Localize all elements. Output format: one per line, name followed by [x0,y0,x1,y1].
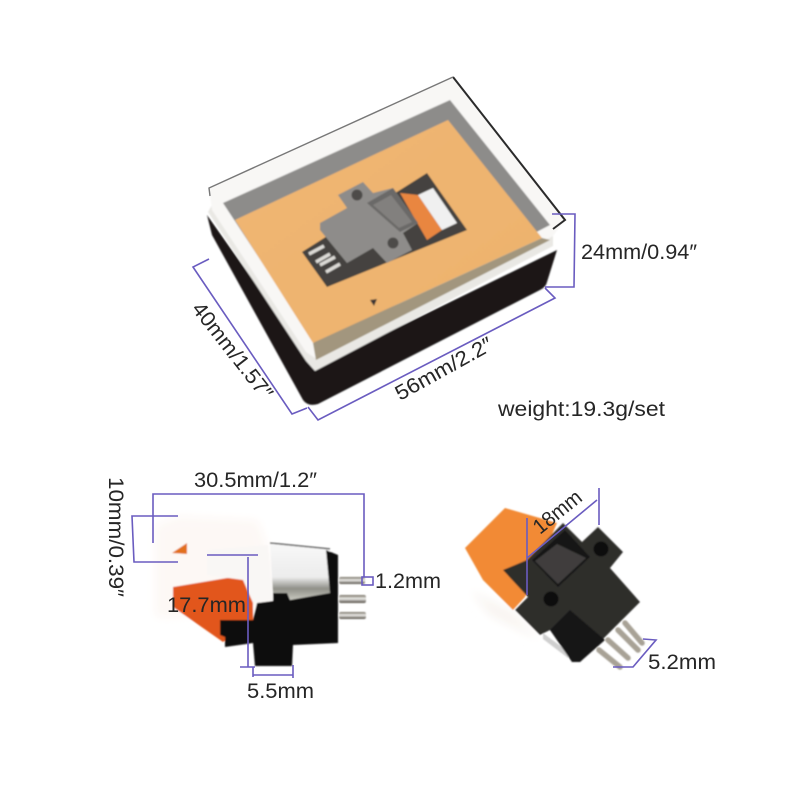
orange stylus [173,577,253,642]
pin box [362,577,373,585]
window floor [373,195,412,228]
side view cartridge photo [155,516,366,666]
shell top edge [270,543,330,549]
cartridge slot [302,173,467,287]
foam strip at front [313,238,550,360]
lid edges [209,77,565,229]
18mm dimension lines [527,488,599,595]
lid dark far edge [453,77,565,229]
cartridge gray body [320,182,418,263]
overall length dimension [153,494,364,577]
label: overall length: 30.5mm/1.2″ [194,469,318,492]
pins [339,577,365,584]
clear lid skirt [208,205,553,371]
cartridge window [367,188,418,232]
pins [309,246,340,272]
label: 18mm: 18mm [529,486,587,539]
width dimension line [193,259,307,414]
5.2mm dimension line [613,639,656,667]
white guard front [207,545,273,603]
label: height: 24mm/0.94″ [581,241,698,264]
black body [220,550,338,666]
label: length: 56mm/2.2″ [391,333,497,405]
silver shell [270,543,332,600]
window floor [535,544,586,584]
label: 17.7mm: 17.7mm [167,594,246,617]
lower block [550,610,605,662]
orange stylus [400,193,442,240]
pins [599,623,642,667]
label: 1.2mm: 1.2mm [375,570,441,593]
black body [503,523,640,662]
stylus dimension [207,554,258,556]
label: weight: weight:19.3g/set [497,398,665,421]
mounting holes [352,190,362,200]
rear view cartridge photo [465,508,642,667]
clear lid top [209,77,565,358]
small orange notch [172,543,187,554]
pale stylus guard wash [155,516,272,617]
lid near edge [209,77,453,196]
label: width: 40mm/1.57″ [187,298,278,405]
white stylus guard [418,188,457,230]
length dimension line [308,288,555,420]
product photo: boxed cartridge [207,77,565,405]
window [532,530,590,587]
black box base [207,215,557,405]
pale guard wash [470,590,540,640]
mounting holes [594,542,608,556]
label: 5.5mm: 5.5mm [247,680,314,703]
height dimension [132,516,178,562]
small notch mark [370,299,377,306]
height dimension line [545,214,575,287]
orange foam pad [235,120,542,343]
stylus vertical dimension [240,557,255,667]
silver shell edge [543,633,570,658]
label: height: 10mm/0.39″ [104,477,127,598]
orange stylus [465,508,557,610]
width dimension [253,665,293,678]
label: 5.2mm: 5.2mm [648,651,716,674]
interior gray surround [223,100,550,346]
